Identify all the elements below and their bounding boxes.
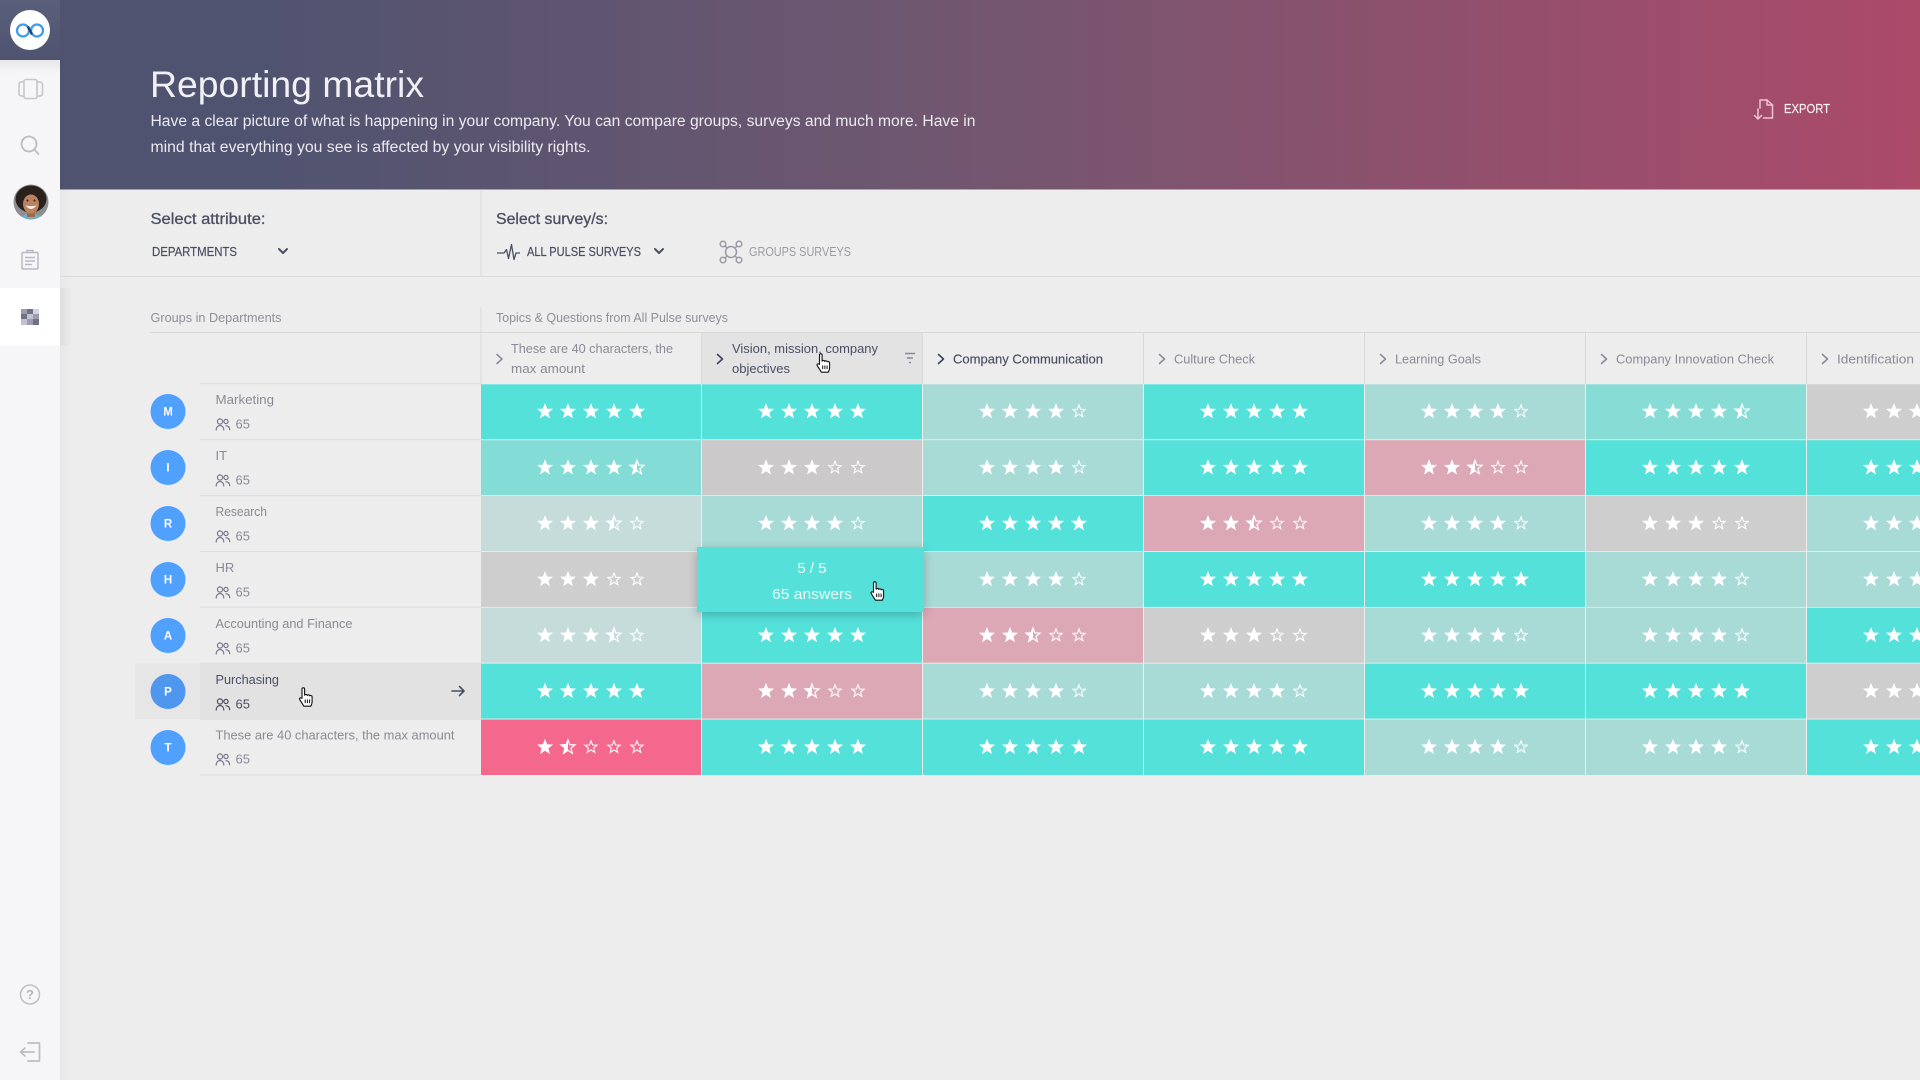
icon: filter [905, 354, 915, 362]
hover tooltip: 65 answers [772, 586, 852, 603]
icon: pulse [497, 244, 520, 260]
column: Learning Goals: Learning Goals [1395, 352, 1481, 366]
group: HR: H [164, 574, 172, 586]
group: These are 40 characters: These are 40 characters, the max amount [216, 728, 455, 742]
group: HR [150, 560, 250, 600]
hover tooltip [697, 547, 924, 612]
row: HR ratings [481, 552, 1920, 607]
section labels [150, 307, 1920, 384]
group labels [135, 384, 481, 775]
group: These are 40 characters: 65 [236, 752, 250, 766]
row: These are 40 characters ratings [481, 720, 1920, 775]
survey selector [496, 211, 663, 260]
icon: help [20, 985, 40, 1004]
group: Research [150, 504, 267, 544]
export button: EXPORT [1784, 102, 1830, 116]
group: These are 40 characters [150, 728, 455, 766]
icon: search [22, 136, 38, 154]
groups surveys toggle [720, 241, 851, 263]
row: Accounting and Finance ratings [481, 608, 1920, 663]
group: HR: 65 [236, 584, 250, 600]
row: Research ratings [481, 496, 1920, 551]
description [150, 113, 976, 156]
header banner [60, 0, 1920, 190]
column: Vision, mission, company objectives [718, 341, 915, 376]
attribute selector [150, 211, 287, 259]
logo block [0, 0, 60, 60]
column: These are 40 characters: These are 40 characters, the [511, 341, 673, 356]
cursor: tooltip [871, 582, 884, 600]
group: Marketing [150, 392, 274, 432]
column: These are 40 characters: max amount [511, 361, 585, 376]
icon: cards [19, 80, 42, 98]
cursor: column header [817, 354, 830, 372]
group: IT [150, 448, 250, 488]
group: IT: IT [216, 448, 227, 463]
group: Research: 65 [236, 528, 250, 544]
group: Marketing: 65 [236, 416, 250, 432]
group: Purchasing (hovered): Purchasing [216, 672, 279, 687]
filter bar [60, 190, 1920, 276]
export button [1754, 100, 1830, 119]
icon: user avatar [14, 184, 48, 220]
survey selector: Select survey/s: [496, 211, 608, 228]
group: Accounting and Finance: 65 [236, 640, 250, 656]
icon: clipboard [22, 250, 38, 269]
row: Purchasing ratings [481, 664, 1920, 719]
title: Reporting matrix [150, 64, 424, 105]
attribute selector: Select attribute: [150, 211, 266, 228]
column headers [497, 333, 1914, 384]
column: Company Innovation Check: Company Innovation Check [1616, 352, 1774, 366]
group: Research: Research [216, 504, 267, 519]
cursor: group row [300, 688, 312, 706]
row: Marketing ratings [481, 384, 1920, 439]
group: Marketing: Marketing [216, 392, 274, 407]
group: Research: R [164, 518, 173, 530]
icon: export file [1754, 100, 1772, 119]
group: IT: I [166, 462, 170, 474]
description: mind that everything you see is affected by your visibility rights. [150, 139, 590, 156]
attribute selector: DEPARTMENTS [152, 245, 237, 259]
group: Accounting and Finance [150, 616, 352, 656]
rating heatmap [481, 384, 1920, 775]
groups surveys toggle: GROUPS SURVEYS [749, 245, 851, 259]
group: Purchasing (hovered): P [164, 686, 172, 698]
icon: arrow right [452, 686, 464, 696]
column: These are 40 characters [497, 341, 673, 376]
row: IT ratings [481, 440, 1920, 495]
group: Purchasing (hovered): 65 [236, 696, 250, 712]
survey selector: ALL PULSE SURVEYS [527, 245, 641, 259]
group: Marketing: M [163, 406, 173, 418]
section labels: Topics & Questions from All Pulse surveys [496, 311, 728, 325]
left sidebar [0, 0, 66, 1080]
column: Identification: Identification [1837, 352, 1914, 366]
column: Company Communication: Company Communication [953, 352, 1103, 366]
hover tooltip: 5 / 5 [797, 560, 827, 577]
column: Vision, mission, company objectives: Vision, mission, company [732, 341, 878, 356]
group: Accounting and Finance: Accounting and Finance [216, 616, 352, 631]
icon: log out [20, 1043, 40, 1061]
group: Accounting and Finance: A [164, 630, 172, 642]
section labels: Groups in Departments [150, 311, 282, 325]
icon: help: ? [26, 987, 34, 1002]
active nav item: matrix [0, 288, 72, 346]
group: These are 40 characters: T [164, 742, 172, 754]
group: IT: 65 [236, 472, 250, 488]
column: Vision, mission, company objectives: objectives [732, 361, 790, 376]
icon: groups network [720, 241, 742, 263]
description: Have a clear picture of what is happening in your company. You can compare groups, surveys and much more. Have in [150, 113, 976, 130]
group: HR: HR [216, 560, 234, 575]
group: Purchasing (hovered) [135, 664, 481, 719]
column: Culture Check: Culture Check [1174, 352, 1255, 366]
